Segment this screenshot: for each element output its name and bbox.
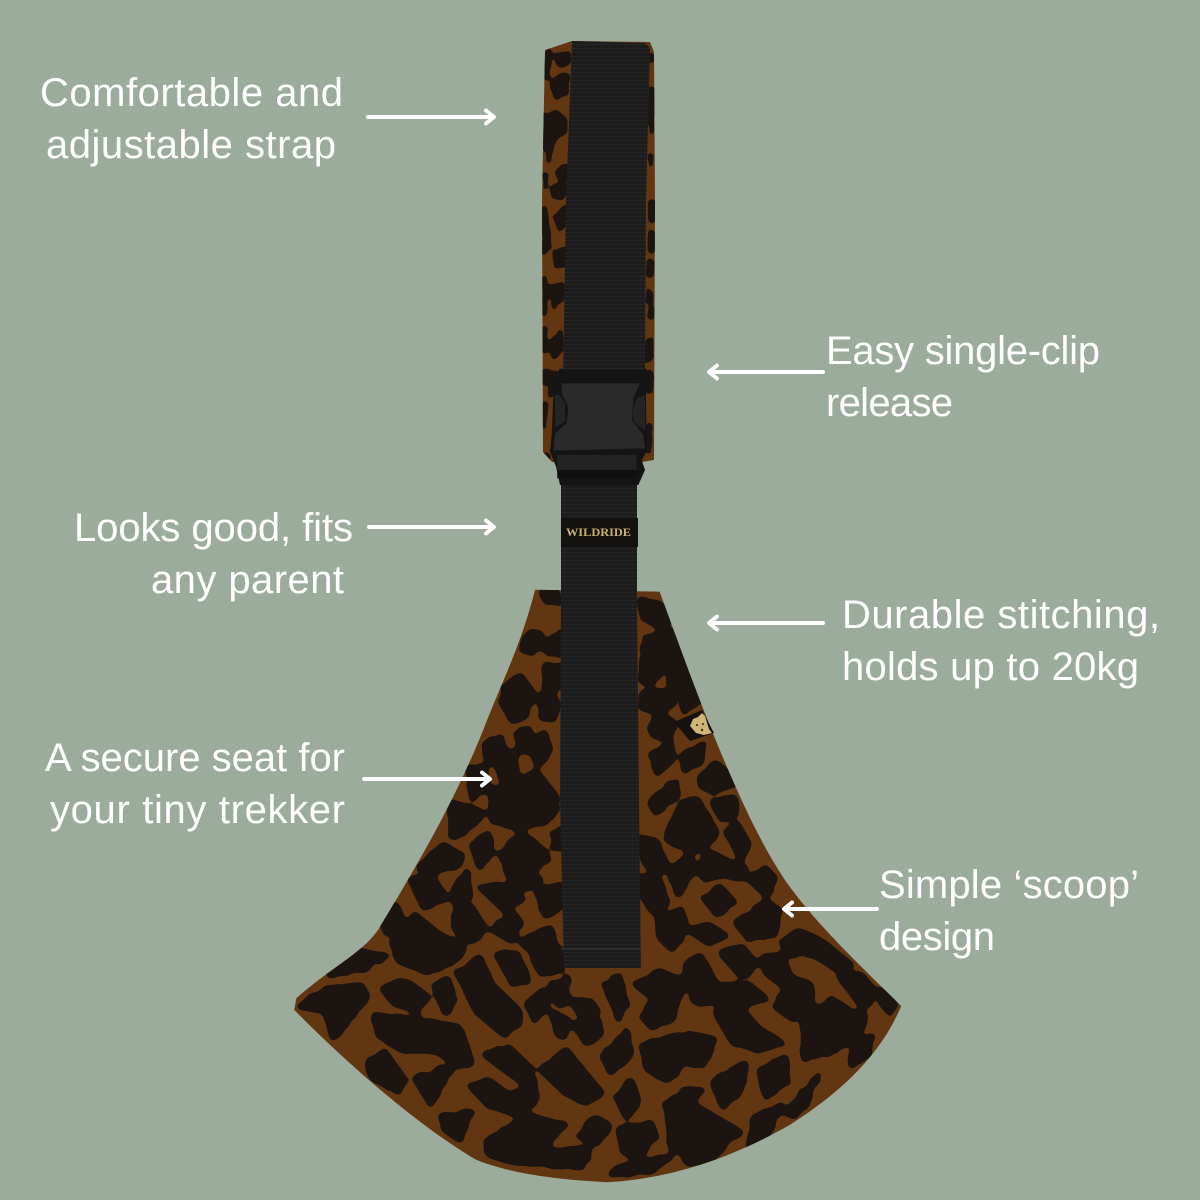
- callout: durable stitching: Durable stitching,: [842, 593, 1160, 637]
- callout: looks good: [74, 506, 494, 602]
- callout: looks good: any parent: [151, 558, 344, 602]
- bear logo tag: [674, 710, 714, 741]
- WILDRIDE label: [561, 518, 638, 547]
- strap end stitching: [561, 948, 641, 950]
- callout: secure seat: A secure seat for: [45, 736, 345, 780]
- callout: single-clip release: [709, 329, 1100, 425]
- callout: comfortable strap: [40, 71, 494, 167]
- callout: secure seat: [45, 736, 490, 832]
- callout: single-clip release: Easy single-clip: [826, 329, 1100, 373]
- callout: durable stitching: holds up to 20kg: [842, 645, 1139, 689]
- callout: comfortable strap: adjustable strap: [46, 123, 336, 167]
- callout: looks good: Looks good, fits: [74, 506, 353, 550]
- callout: comfortable strap: Comfortable and: [40, 71, 343, 115]
- lower webbing strap: [560, 484, 641, 968]
- scoop fabric seat: [294, 590, 901, 1182]
- callout: secure seat: your tiny trekker: [50, 788, 345, 832]
- WILDRIDE label: WILDRIDE: [566, 527, 631, 539]
- upper webbing strap: [563, 41, 650, 380]
- product: sling: [294, 41, 901, 1182]
- callout: scoop design: Simple ‘scoop’: [879, 863, 1139, 907]
- buckle: [550, 368, 648, 485]
- shoulder strap padding: [542, 41, 655, 462]
- callout: scoop design: [784, 863, 1139, 959]
- callout: scoop design: design: [879, 915, 995, 959]
- callout: single-clip release: release: [826, 381, 953, 425]
- callout: durable stitching: [709, 593, 1160, 689]
